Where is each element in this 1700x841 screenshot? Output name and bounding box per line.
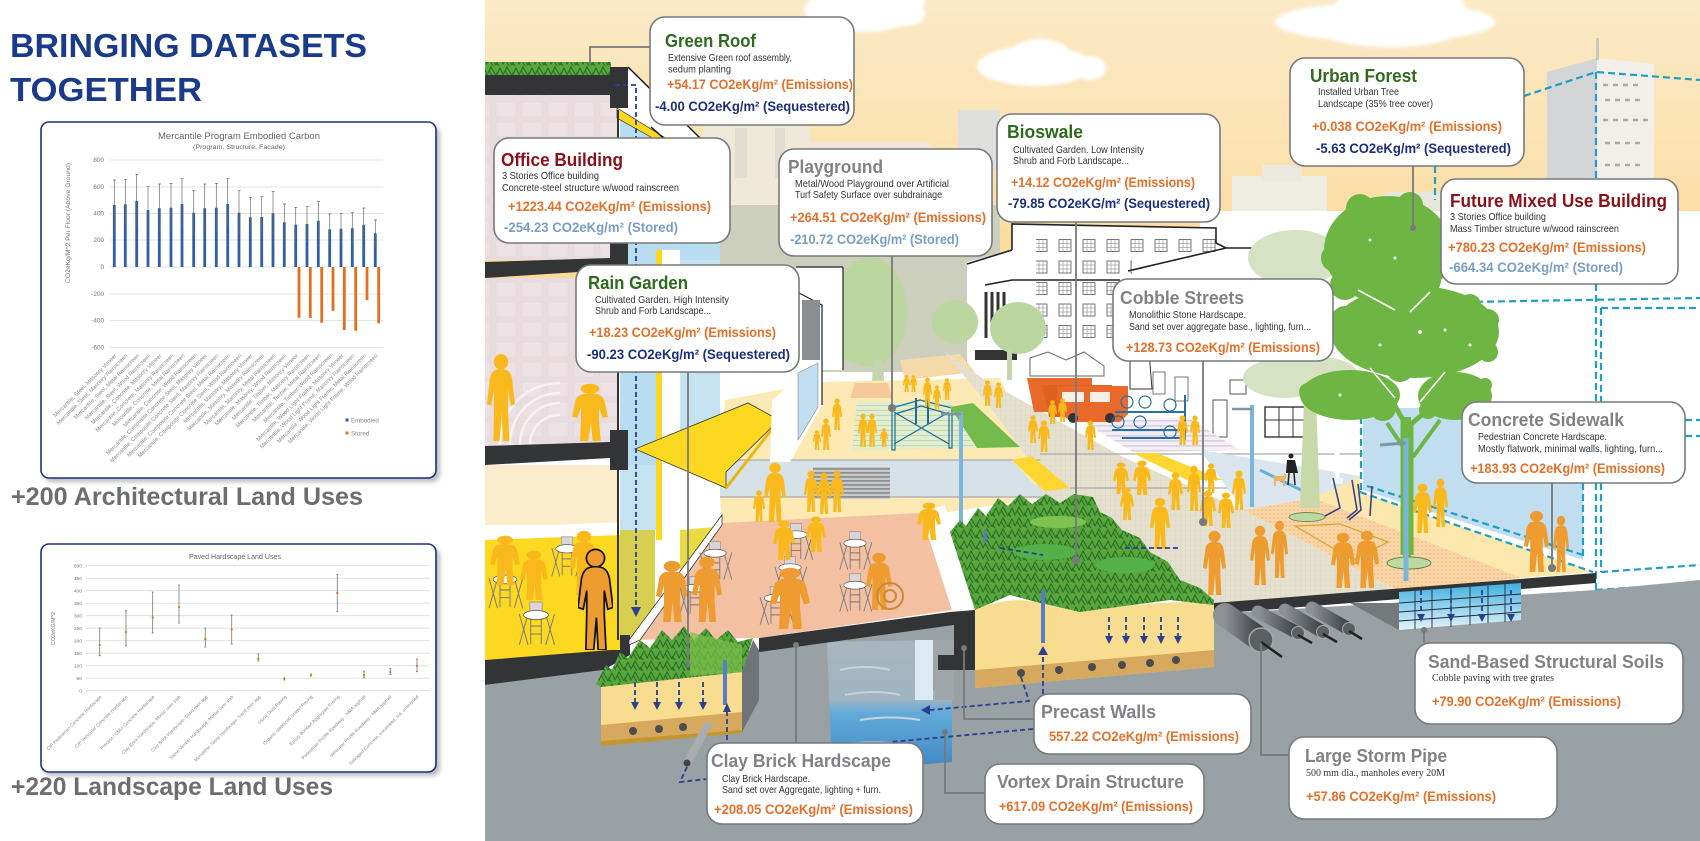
description	[1013, 144, 1145, 167]
category labels: Epoxy Bonded Aggregate Paving	[289, 694, 341, 746]
y axis labels: 600	[93, 184, 104, 191]
callout: Concrete Sidewalk	[1462, 402, 1685, 483]
description: Concrete-steel structure w/wood rainscreen	[502, 182, 679, 194]
heading: Vortex Drain Structure: Vortex Drain Structure	[997, 771, 1184, 792]
description: Monolithic Stone Hardscape.	[1129, 309, 1246, 321]
description: Cultivated Garden. High Intensity	[595, 294, 730, 306]
storm pipes	[1225, 603, 1399, 657]
category labels: Mercantile, Masonry, Masonry Rainscreen	[187, 353, 266, 432]
description: Sand set over Aggregate, lighting + furn.	[722, 784, 881, 796]
y axis labels: 200	[74, 638, 82, 644]
values: +0.038 CO2eKg/m² (Emissions)	[1312, 118, 1502, 134]
leader lines	[590, 47, 1556, 793]
category labels: Mercantile, Timber, Wood Rainscreen	[263, 353, 334, 424]
heading: Urban Forest: Urban Forest	[1310, 65, 1417, 86]
bike racks	[1112, 395, 1185, 440]
cafe tables	[489, 524, 872, 645]
title	[10, 28, 367, 109]
white street buildings	[967, 224, 1365, 490]
values: -5.63 CO2eKg/m² (Sequestered)	[1316, 140, 1511, 156]
value: +128.73 CO2eKg/m² (Emissions)	[1126, 339, 1320, 355]
street crossing band	[718, 453, 1400, 499]
slabs	[759, 573, 1596, 670]
category labels: Vehicular Profile Roadway - HMA asphalt	[329, 694, 393, 758]
stored bars	[299, 267, 379, 331]
y axis labels: 0	[100, 264, 104, 271]
description: 3 Stories Office building	[502, 170, 599, 182]
heading: Large Storm Pipe: Large Storm Pipe	[1305, 745, 1447, 766]
description	[668, 52, 792, 76]
category labels: Mercantile, Timber, Metal Rainscreen	[252, 353, 322, 424]
title: BRINGING DATASETS	[10, 28, 367, 65]
lamp at hero tree	[1380, 438, 1431, 581]
callout: Sand-Based Structural Soils	[1415, 643, 1683, 724]
white mid-ground block	[1200, 211, 1700, 596]
description: Cultivated Garden. Low Intensity	[1013, 144, 1145, 156]
value: +79.90 CO2eKg/m² (Emissions)	[1432, 693, 1621, 709]
category labels: Mercantile, Wood Light Frame, Masonry Veneer	[256, 353, 345, 443]
chart title	[158, 131, 320, 151]
category labels: Stone Veneer Hardscape, Mortar over slab	[168, 694, 235, 761]
values	[655, 76, 853, 114]
category labels: Mercantile, Concrete, Masonry Rainscreen	[95, 353, 175, 434]
awning	[635, 403, 779, 488]
callout: Bioswale	[997, 114, 1220, 222]
category labels: Mercantile, Steel, Metal Rainscreen	[73, 353, 141, 421]
roof planting	[485, 62, 611, 76]
planted median	[950, 403, 1020, 448]
category labels: Mercantile, Steel, Masonry Veneer	[53, 353, 118, 419]
category labels: Mercantile, Composite Concrete Steel, Masonry Rainscreen	[109, 353, 220, 464]
y axis labels: 100	[74, 664, 82, 670]
chart title: Paved Hardscape Land Uses	[189, 552, 281, 561]
value: +617.09 CO2eKg/m² (Emissions)	[999, 798, 1193, 814]
panel: hardscape range chart	[41, 544, 440, 776]
description: Sand set over aggregate base., lighting, furn...	[1129, 321, 1311, 333]
rain garden	[596, 626, 759, 766]
values	[1448, 239, 1646, 275]
category labels: Mercantile, Wood Light Frame, Masonry Rainscreen	[259, 353, 356, 450]
callout: Rain Garden	[576, 265, 799, 372]
playground surface	[850, 354, 975, 450]
category labels: Mercantile, Masonry, Masonry Veneer	[183, 353, 254, 425]
upper floors	[485, 95, 620, 260]
values: +18.23 CO2eKg/m² (Emissions)	[589, 324, 776, 340]
category labels: Mercantile, Concrete, Metal Rainscreen	[112, 353, 186, 428]
description: Shrub and Forb Landscape...	[1013, 155, 1129, 167]
description	[722, 773, 881, 796]
scooters	[1325, 478, 1372, 520]
description	[1318, 86, 1433, 110]
heading: Precast Walls: Precast Walls	[1041, 701, 1156, 722]
heading: Future Mixed Use Building: Future Mixed Use Building	[1450, 190, 1667, 211]
cafe terrace	[629, 505, 975, 645]
left panel: datasets	[10, 28, 440, 801]
category labels: Mercantile, Wood Light Frame, Metal Rainscreen	[276, 353, 368, 445]
people: yellow figures	[487, 354, 1448, 600]
caption: landscape land uses: +220 Landscape Land Uses	[11, 773, 333, 801]
mean points	[99, 592, 418, 680]
category labels: Salvaged Concrete, excavated, cut, unfinished	[348, 694, 420, 766]
y axis labels: 800	[93, 157, 104, 164]
callout: Cobble Streets	[1113, 279, 1333, 361]
haze behind street	[720, 205, 1000, 372]
callout: Playground	[779, 149, 992, 256]
callout: Large Storm Pipe	[1289, 737, 1557, 819]
category labels	[53, 353, 379, 464]
structural soils	[1399, 583, 1521, 630]
y axis labels: -200	[91, 291, 104, 298]
category labels: Mercantile, Timber, Masonry Rainscreen	[235, 353, 311, 429]
heading: Playground: Playground	[788, 156, 883, 177]
side wall and window	[770, 267, 843, 462]
values: -90.23 CO2eKg/m² (Sequestered)	[587, 346, 790, 362]
dog	[1273, 473, 1287, 486]
bioswale mound	[950, 494, 1214, 688]
description	[1450, 211, 1619, 235]
callout: Vortex Drain Structure	[985, 764, 1204, 824]
ground	[485, 580, 1700, 841]
heading: Rain Garden: Rain Garden	[588, 272, 688, 293]
description: Pedestrian Concrete Hardscape.	[1478, 431, 1607, 443]
chart title: Mercantile Program Embodied Carbon	[158, 131, 320, 142]
category labels: Mercantile, Concrete, Wood Rainscreen	[122, 353, 198, 429]
y axis labels: 0	[79, 688, 82, 694]
values: -210.72 CO2eKg/m² (Stored)	[790, 231, 959, 247]
y axis labels: 450	[74, 576, 82, 582]
category labels: Mercantile, Timber, Masonry Veneer	[231, 353, 300, 422]
left building section	[485, 62, 843, 685]
category labels: Precast / CMU Concrete Hardscape	[99, 694, 156, 751]
category labels: Mercantile, Concrete, Masonry Veneer	[91, 353, 163, 426]
y axis labels: 500	[74, 564, 82, 570]
caption: architectural land uses: +200 Architectural Land Uses	[11, 483, 363, 511]
description: Cobble paving with tree grates	[1432, 673, 1554, 684]
values: +264.51 CO2eKg/m² (Emissions)	[790, 209, 986, 225]
y axis labels: 150	[74, 651, 82, 657]
category labels: Mercantile, Steel, Wood Rainscreen	[84, 353, 152, 421]
description: Metal/Wood Playground over Artificial	[795, 178, 949, 190]
category labels	[46, 694, 420, 766]
pale street trees	[833, 230, 1358, 426]
heading: Sand-Based Structural Soils: Sand-Based Structural Soils	[1428, 651, 1664, 672]
callout: Office Building	[494, 138, 730, 243]
clouds	[804, 0, 1495, 86]
ghost future building	[1360, 72, 1700, 590]
category labels: Pedestrian Profile Roadway - HMA asphalt	[301, 694, 367, 760]
description: 3 Stories Office building	[1450, 211, 1546, 223]
sky	[485, 0, 1700, 300]
heading: Cobble Streets: Cobble Streets	[1120, 287, 1244, 308]
y axis labels: 50	[77, 676, 82, 682]
ground floor	[485, 465, 620, 525]
description	[1129, 309, 1311, 333]
water arrows	[615, 85, 1515, 782]
category labels: Mercantile, Masonry, Metal Rainscreen	[204, 353, 277, 427]
callout: Green Roof	[650, 17, 854, 125]
description: Installed Urban Tree	[1318, 86, 1399, 98]
y axis title: CO2eKg/M^2 Per Floor (Above Ground)	[65, 163, 72, 283]
category labels: Mercantile, Wood Light Frame, Wood Rainscreen	[287, 353, 379, 445]
callout: Precast Walls	[1034, 694, 1251, 754]
floor slabs	[485, 67, 628, 108]
values: -79.85 CO2eKG/m² (Sequestered)	[1008, 195, 1210, 211]
y axis labels: -400	[91, 318, 104, 324]
description	[1478, 431, 1663, 455]
y axis title: CO2eKG/M^2	[51, 612, 57, 645]
values: +1223.44 CO2eKg/m² (Emissions)	[508, 198, 711, 214]
vortex drain water	[827, 640, 954, 772]
description: Mostly flatwork, minimal walls, lighting, furn...	[1478, 443, 1663, 455]
street lamps	[941, 405, 1343, 525]
right side sidewalks	[1200, 450, 1593, 590]
values: +780.23 CO2eKg/m² (Emissions)	[1448, 239, 1646, 255]
category labels: Organic stabilized Gravel Paving	[262, 694, 314, 746]
hero tree	[1299, 192, 1499, 557]
values: -4.00 CO2eKg/m² (Sequestered)	[655, 98, 850, 114]
cobble street	[945, 352, 1397, 606]
category labels: Clay Brick Hardscape, Sand over agg	[150, 694, 209, 753]
heading: Clay Brick Hardscape: Clay Brick Hardscape	[711, 750, 891, 771]
category labels: CIP Pedestrian Concrete Hardscape	[46, 694, 103, 751]
heading: Bioswale: Bioswale	[1007, 121, 1083, 142]
people	[487, 354, 1569, 650]
heading: Office Building: Office Building	[501, 149, 623, 170]
description: 500 mm dia., manholes every 20M	[1306, 768, 1446, 779]
people: orange figures	[578, 511, 1569, 650]
embodied bars	[114, 201, 375, 267]
legend: Stored	[351, 430, 370, 438]
y axis labels: 250	[74, 626, 82, 632]
category labels: Mercantile, Composite Concrete Steel, Wood Rainscreen	[137, 353, 243, 459]
values: -254.23 CO2eKg/m² (Stored)	[504, 219, 678, 235]
value: +57.86 CO2eKg/m² (Emissions)	[1306, 788, 1496, 804]
y axis labels: 350	[74, 601, 82, 607]
y axis labels: 400	[93, 210, 104, 218]
callout: Future Mixed Use Building	[1441, 179, 1678, 284]
food trucks	[1027, 352, 1128, 423]
description	[595, 294, 730, 317]
values: +14.12 CO2eKg/m² (Emissions)	[1011, 174, 1195, 190]
description: Landscape (35% tree cover)	[1318, 98, 1433, 110]
panel: architectural bar chart	[41, 122, 440, 482]
cream plaza	[718, 378, 1040, 525]
background towers	[703, 38, 1700, 297]
category labels: Mercantile, Steel, Masonry Rainscreen	[56, 353, 129, 426]
y axis labels: 200	[93, 237, 104, 244]
values	[790, 209, 986, 247]
values	[504, 198, 711, 235]
heading: Concrete Sidewalk: Concrete Sidewalk	[1468, 409, 1625, 430]
glass wall	[1363, 408, 1583, 560]
legend: Embodied	[351, 418, 379, 424]
description	[502, 170, 679, 194]
values: +54.17 CO2eKg/m² (Emissions)	[667, 76, 853, 92]
values: -664.34 CO2eKg/m² (Stored)	[1449, 259, 1623, 275]
category labels: Mercantile, Composite Concrete Steel, Metal Rainscreen	[126, 353, 232, 459]
value: +208.05 CO2eKg/m² (Emissions)	[714, 801, 913, 817]
description: Shrub and Forb Landscape...	[595, 305, 711, 317]
pale tree trunk on sidewalk	[1289, 400, 1325, 522]
y axis labels	[74, 564, 82, 694]
callout: Urban Forest	[1290, 58, 1524, 166]
description: Mass Timber structure w/wood rainscreen	[1450, 223, 1619, 235]
wheelchair	[877, 583, 903, 609]
illustration: street section	[485, 0, 1700, 841]
chart title: (Program, Structure, Facade)	[193, 144, 285, 151]
bike parking surface	[1080, 417, 1240, 452]
pedestrian with dog	[1286, 454, 1298, 485]
category labels: CIP Vehicular Concrete Hardscape	[74, 694, 129, 749]
values	[1008, 174, 1210, 211]
value: +183.93 CO2eKg/m² (Emissions)	[1470, 460, 1665, 476]
yellow scooter parking	[1295, 524, 1388, 560]
category labels: Monolithic Stone Hardscape, Sand over agg	[193, 694, 262, 763]
y axis labels	[91, 157, 104, 352]
value: 557.22 CO2eKg/m² (Emissions)	[1049, 728, 1239, 744]
description: Extensive Green roof assembly,	[668, 52, 792, 64]
callout: Clay Brick Hardscape	[707, 743, 923, 824]
y axis labels: 300	[74, 614, 82, 620]
heading: Green Roof: Green Roof	[665, 30, 757, 51]
legend	[346, 418, 379, 438]
y axis labels: 400	[74, 588, 82, 594]
description: Turf Safety Surface over subdrainage	[795, 189, 942, 201]
values	[1312, 118, 1511, 156]
title: TOGETHER	[10, 72, 202, 109]
range bars	[99, 574, 418, 681]
y axis labels: -600	[91, 344, 104, 352]
category labels: Stone Dust Paving	[257, 694, 288, 725]
facade glazing	[617, 67, 720, 640]
category labels: Mercantile, Composite Concrete Steel, Masonry Veneer	[105, 353, 209, 457]
category labels: Mercantile, Masonry, Wood Rainscreen	[214, 353, 288, 427]
description	[795, 178, 949, 201]
values	[587, 324, 790, 362]
description: Clay Brick Hardscape.	[722, 773, 810, 785]
error bars	[113, 174, 377, 247]
description: sedum planting	[668, 64, 731, 76]
category labels: Clay Brick Hardscape, Mortar over slab	[121, 694, 182, 755]
